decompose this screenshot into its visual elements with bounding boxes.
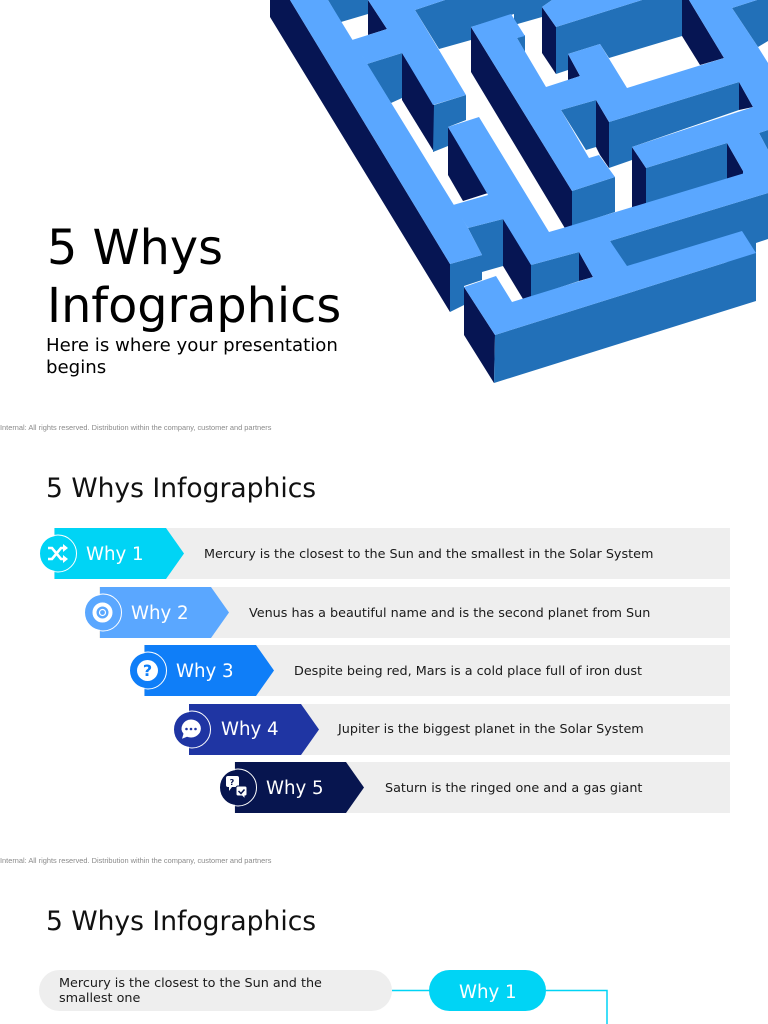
row: Why 5: [220, 762, 730, 813]
text pill: [39, 970, 392, 1011]
row: Why 2: Why 2: [131, 603, 189, 624]
row: Why 1: Mercury is the closest to the Sun and the smallest in the Solar System: [204, 547, 653, 562]
row: Why 1: Why 1: [86, 544, 144, 565]
footer note: Internal: All rights reserved. Distribution within the company, customer and partners: [0, 423, 271, 432]
row: Why 1: [40, 528, 730, 579]
subtitle: begins: [46, 357, 106, 378]
heading: slide 3: 5 Whys Infographics: [46, 906, 316, 937]
pill: Why 1: Why 1: [459, 982, 517, 1003]
row: Why 5: Saturn is the ringed one and a gas giant: [385, 781, 642, 796]
heading: slide 2: 5 Whys Infographics: [46, 473, 316, 504]
row: Why 5: Why 5: [266, 778, 324, 799]
row: Why 4: Why 4: [221, 719, 279, 740]
footer note: Internal: All rights reserved. Distribution within the company, customer and partners: [0, 856, 271, 865]
row: Why 4: Jupiter is the biggest planet in the Solar System: [338, 722, 644, 737]
row: Why 3: Why 3: [176, 661, 234, 682]
row: Why 3: Despite being red, Mars is a cold place full of iron dust: [294, 664, 642, 679]
row: Why 3: [130, 645, 730, 696]
subtitle: [46, 335, 338, 378]
row: Why 4: [174, 704, 730, 755]
subtitle: Here is where your presentation: [46, 335, 338, 356]
pill: Why 1: [429, 970, 546, 1011]
text pill: smallest one: [59, 991, 140, 1006]
row: Why 5: ?: [230, 778, 235, 787]
row: Why 2: Venus has a beautiful name and is the second planet from Sun: [249, 606, 650, 621]
title: [47, 221, 341, 334]
row: Why 3: ?: [143, 661, 152, 680]
title: 5 Whys: [47, 221, 223, 276]
text pill: Mercury is the closest to the Sun and the: [59, 976, 322, 991]
title: Infographics: [47, 279, 341, 334]
row: Why 2: [85, 587, 730, 638]
